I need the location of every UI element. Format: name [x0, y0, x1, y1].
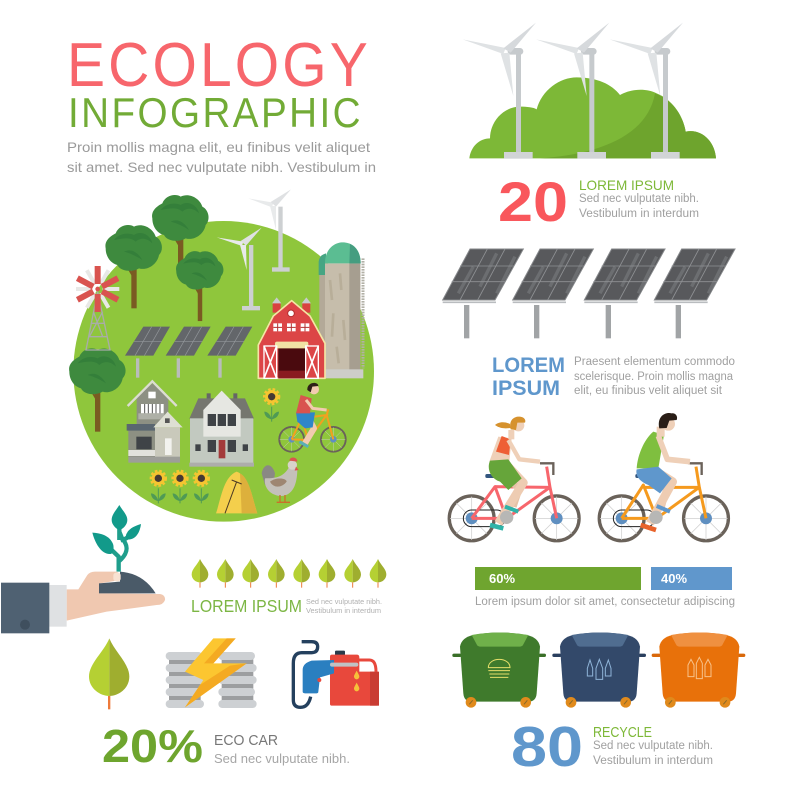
panel: cyclists: [449, 413, 728, 541]
leaves caption: Sed nec vulputate nibh.: [306, 597, 382, 606]
solar text block: IPSUM: [492, 377, 560, 400]
green circle background: [73, 221, 374, 522]
green bar 60%: 60%: [489, 571, 515, 586]
stat 80: Vestibulum in interdum: [593, 755, 713, 767]
icon: big leaf: [89, 638, 129, 709]
house two: [189, 391, 254, 467]
stat 80: 80: [511, 715, 583, 779]
stat 20% eco car: ECO CAR: [214, 732, 278, 749]
solar text block: Praesent elementum commodo: [574, 356, 735, 368]
leaves caption: [191, 596, 382, 616]
solar text block: LOREM: [492, 354, 565, 377]
panel: wind turbines on hill: [463, 23, 716, 159]
title: [67, 30, 368, 136]
stat 20% eco car: 20%: [102, 720, 203, 772]
woman cyclist: [449, 417, 579, 541]
intro text: Proin mollis magna elit, eu finibus velit aliquet: [67, 139, 370, 155]
panel: recycling bins: [452, 632, 745, 708]
stat 20% eco car: Sed nec vulputate nibh.: [214, 751, 350, 766]
small solar panels: [125, 327, 252, 378]
stat 20% eco car: [102, 720, 350, 772]
row of leaves: [192, 559, 386, 588]
icon: battery with lightning: [166, 638, 257, 708]
windmill: [76, 266, 119, 350]
orange bin: [652, 632, 745, 708]
stat 80: Sed nec vulputate nibh.: [593, 740, 713, 752]
hand: [67, 572, 165, 621]
green bin: [452, 632, 546, 708]
man cyclist: [599, 413, 728, 541]
intro text: [67, 139, 376, 175]
hay stack: [216, 472, 257, 513]
stat 20: LOREM IPSUM: [579, 177, 674, 193]
stat 20: Vestibulum in interdum: [579, 208, 699, 220]
trees: [69, 195, 223, 432]
panel: hand with seedling: [1, 505, 165, 633]
blue bar 40%: 40%: [661, 571, 687, 586]
turbine two: [536, 23, 609, 159]
solar panels row: [443, 249, 735, 338]
turbine one: [463, 23, 536, 159]
barn: [258, 297, 325, 378]
bar chart: 60 / 40: [475, 567, 735, 608]
green bar 60%: [475, 567, 641, 590]
blue bin: [552, 632, 646, 708]
leaves caption: Vestibulum in interdum: [306, 606, 381, 615]
sunflowers: [151, 390, 279, 503]
stat 80: [511, 715, 713, 779]
stat 20: [498, 170, 699, 233]
green hill: [469, 77, 716, 158]
rooster: [262, 458, 299, 502]
cyclist: [279, 383, 346, 452]
seedling: [92, 505, 141, 572]
blue bar 40%: [651, 567, 732, 590]
title: INFOGRAPHIC: [68, 88, 361, 136]
wind turbines: [217, 189, 291, 310]
jacket sleeve: [1, 583, 49, 633]
title: ECOLOGY: [67, 30, 368, 100]
silo: [319, 242, 363, 378]
solar text block: elit, eu finibus velit aliquet sit: [574, 385, 723, 397]
intro text: sit amet. Sed nec vulputate nibh. Vestibulum in: [67, 159, 376, 175]
stat 80: RECYCLE: [593, 725, 652, 741]
icon: fuel can and nozzle: [293, 642, 379, 707]
solar text block: [492, 354, 735, 400]
turbine three: [610, 23, 683, 159]
bar caption: Lorem ipsum dolor sit amet, consectetur adipiscing: [475, 596, 735, 608]
solar text block: scelerisque. Proin mollis magna: [574, 371, 734, 383]
leaves caption: LOREM IPSUM: [191, 596, 302, 616]
shirt cuff: [49, 585, 67, 627]
house one: [127, 381, 183, 463]
stat 20: Sed nec vulputate nibh.: [579, 193, 699, 205]
panel: farm circle: [69, 189, 374, 522]
stat 20: 20: [498, 170, 568, 233]
